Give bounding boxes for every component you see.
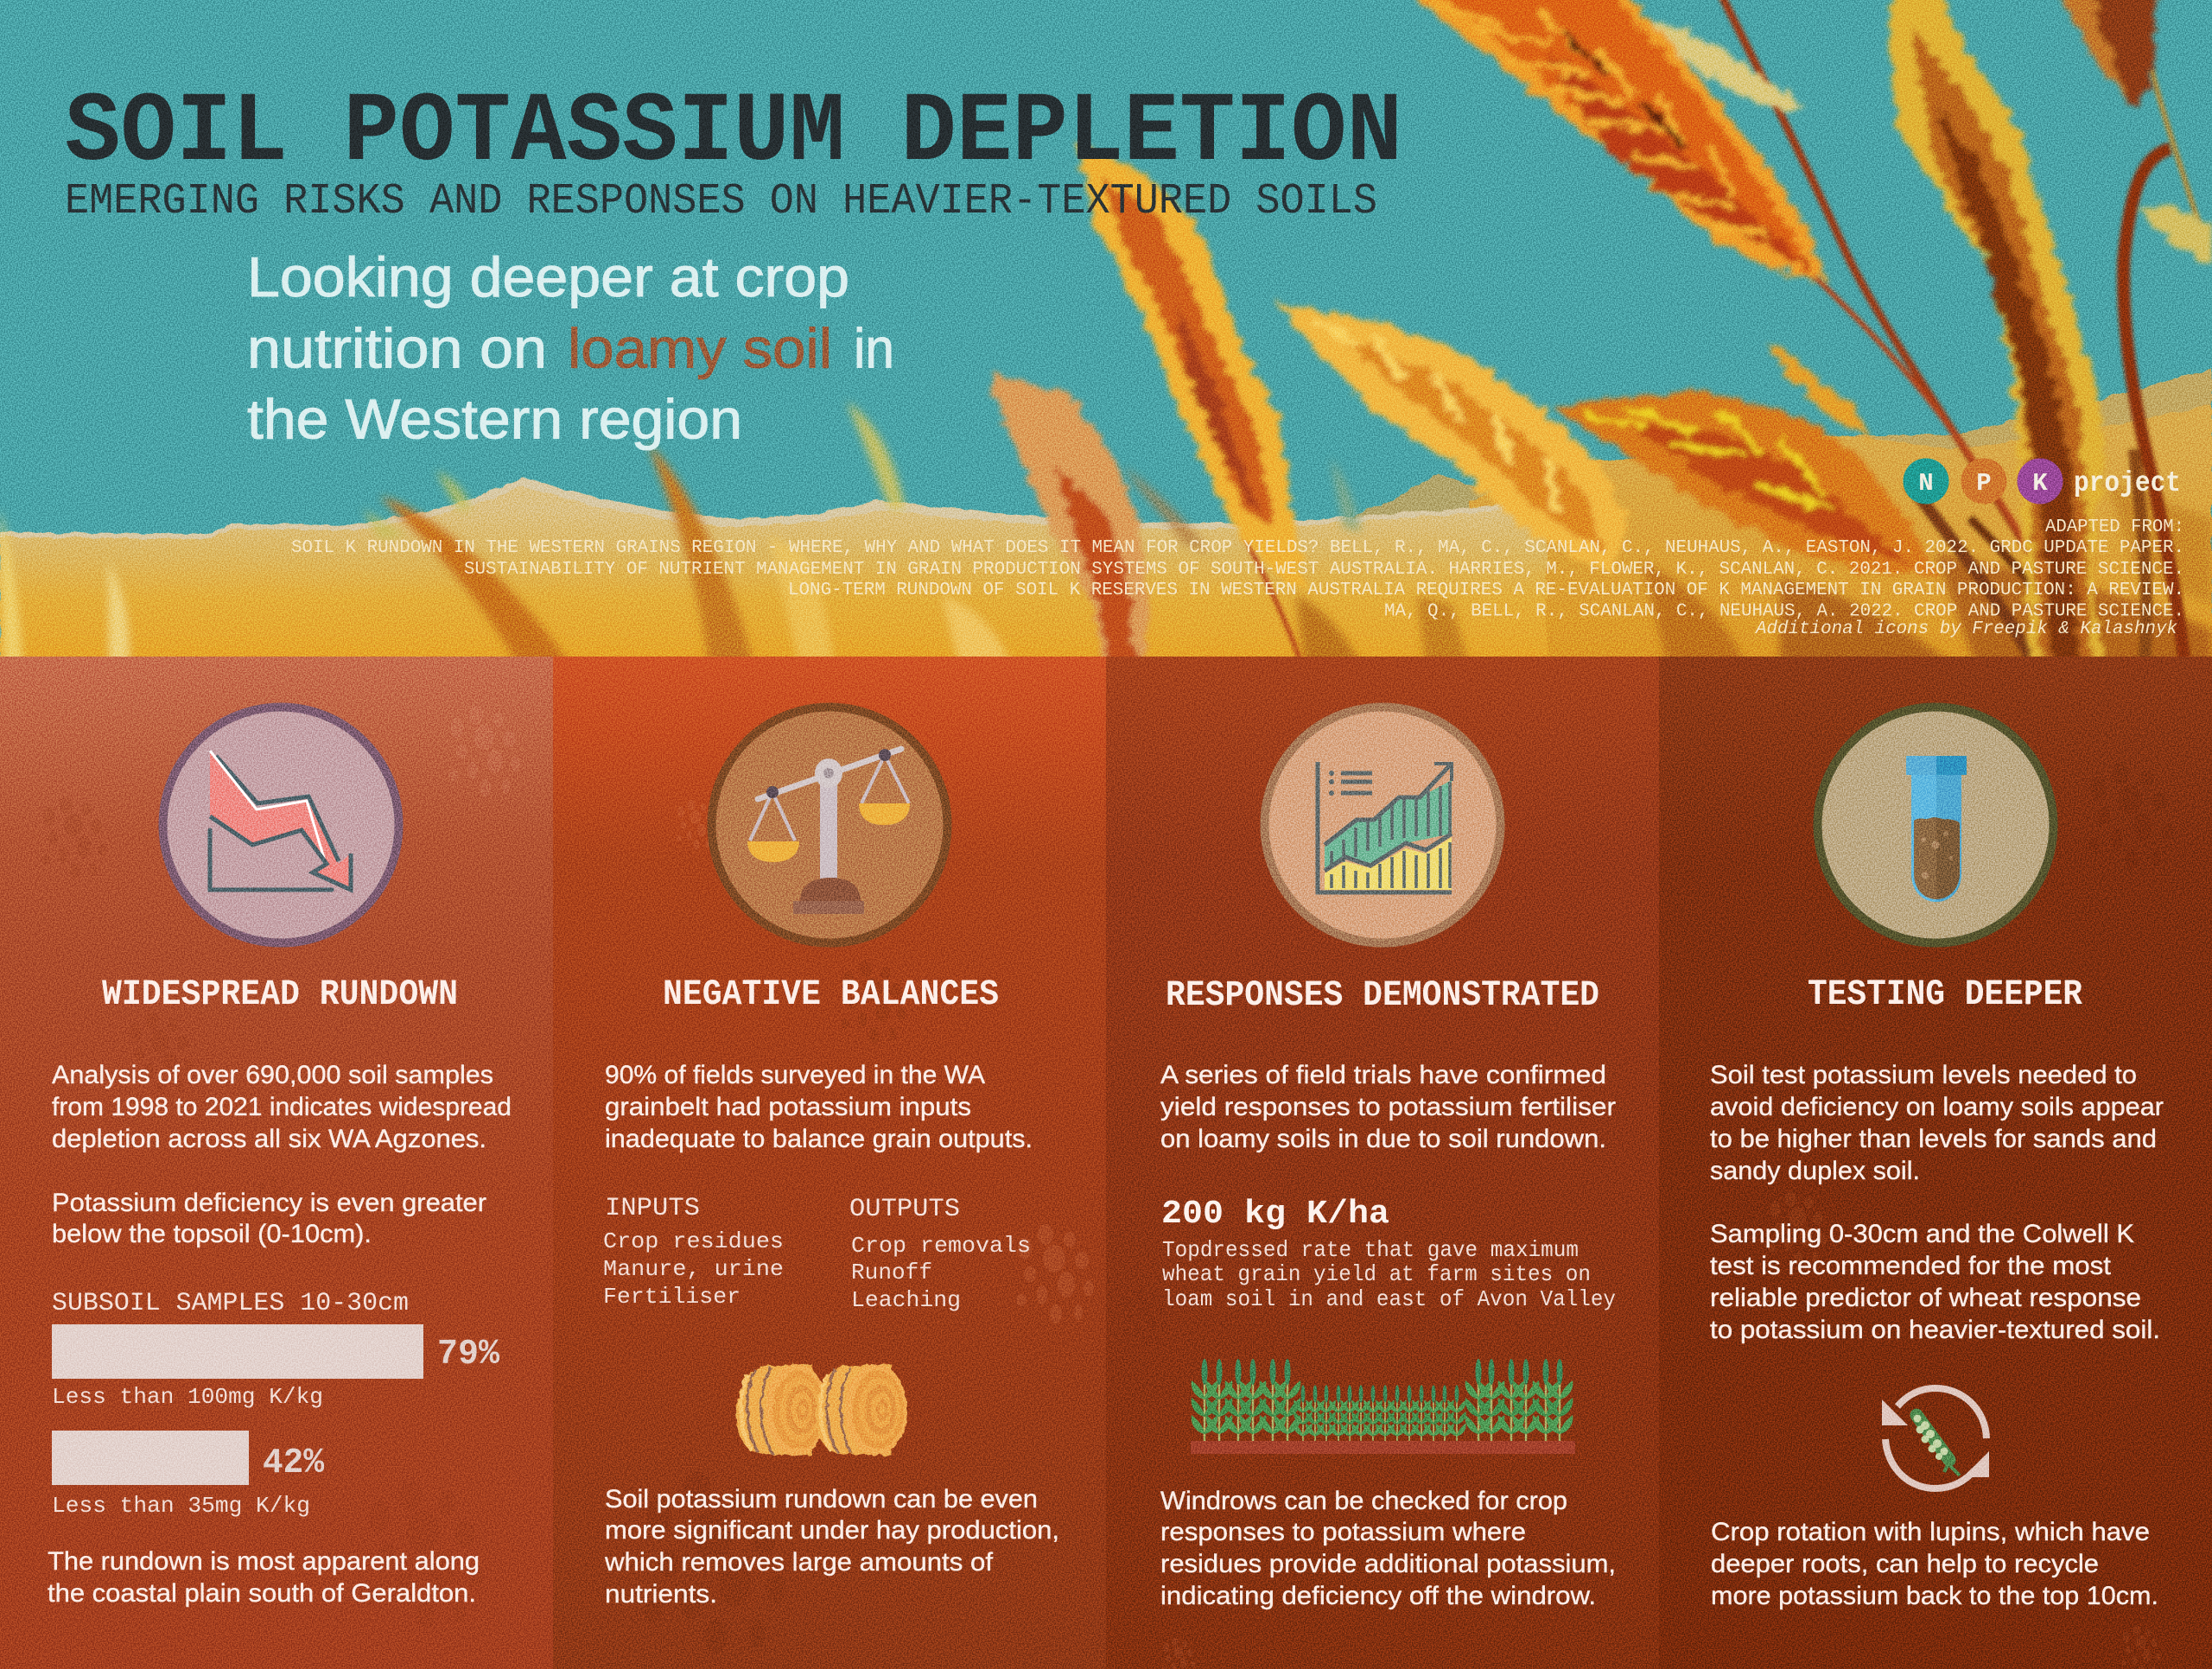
intro text: to be higher than levels for sands and [1710,1125,2157,1153]
tagline: the Western region [247,387,742,451]
heading: TESTING DEEPER [1808,974,2083,1015]
rotation text: deeper roots, can help to recycle [1711,1550,2099,1578]
panel: header wheat field illustration [0,0,2212,691]
heading: WIDESPREAD RUNDOWN [102,974,458,1015]
hay text [604,1485,1059,1609]
icon: rising yield chart [1265,707,1500,943]
hay text: Soil potassium rundown can be even [605,1485,1038,1514]
intro text: depletion across all six WA Agzones. [52,1125,486,1153]
tagline: loamy soil [568,316,832,380]
closing text [48,1547,480,1608]
head F [2074,0,2160,108]
outputs list: Leaching [851,1287,961,1313]
bar chart: subsoil samples: Less than 100mg K/kg [52,1384,323,1410]
outputs list: Runoff [851,1260,932,1285]
inputs list: Crop residues [603,1228,784,1254]
source credits: ADAPTED FROM: [2045,517,2184,537]
pale plume [1624,13,1802,110]
closing text: the coastal plain south of Geraldton. [48,1579,476,1608]
intro text [1160,1061,1616,1153]
windrow text: Windrows can be checked for crop [1160,1487,1567,1515]
bar chart: subsoil samples [52,1289,499,1519]
heading: RESPONSES DEMONSTRATED [1166,974,1599,1016]
stat: 200 kg K/ha: loam soil in and east of Avon Valley [1162,1286,1616,1312]
panel: negative balances [553,657,1106,1669]
subtitle: EMERGING RISKS AND RESPONSES ON HEAVIER-TEXTURED SOILS [65,177,1377,226]
tagline: Looking deeper at crop [247,245,849,308]
head B [1891,0,2108,682]
far hills [0,369,2212,691]
windrow text: responses to potassium where [1160,1518,1526,1546]
bar chart: subsoil samples: Less than 35mg K/kg [52,1493,310,1519]
head G [988,372,1149,682]
sampling text: to potassium on heavier-textured soil. [1710,1316,2160,1344]
hay text: nutrients. [605,1580,717,1609]
head C [1076,143,1305,596]
outputs list [849,1195,1031,1313]
NPK project logo: N [1918,469,1934,498]
windrow text [1160,1487,1616,1610]
blurred background stalks [0,402,2212,674]
intro text [1710,1061,2164,1185]
NPK project logo: P [1976,469,1992,498]
NPK project logo: project [2074,467,2181,499]
rotation text: Crop rotation with lupins, which have [1711,1518,2150,1546]
inputs list: INPUTS [605,1194,700,1223]
head A [1387,0,1827,285]
hay text: more significant under hay production, [605,1516,1059,1545]
icon: crop rotation cycle [1882,1388,1989,1488]
outputs list: OUTPUTS [849,1195,960,1224]
rotation text: more potassium back to the top 10cm. [1711,1582,2158,1610]
icon: soil test tube [1818,707,2053,943]
intro text: grainbelt had potassium inputs [605,1093,971,1121]
inputs list [603,1194,784,1310]
windrow text: residues provide additional potassium, [1160,1550,1616,1578]
NPK project logo [1903,458,2181,505]
intro text: sandy duplex soil. [1710,1157,1920,1185]
sampling text [1710,1220,2160,1344]
bar chart: subsoil samples: 42% [263,1444,324,1483]
tagline [247,245,894,451]
intro text: Analysis of over 690,000 soil samples [52,1061,493,1089]
panel: testing deeper [1659,657,2212,1669]
intro text: avoid deficiency on loamy soils appear [1710,1093,2164,1121]
intro text: Soil test potassium levels needed to [1710,1061,2137,1089]
icon: balance scales [712,707,947,943]
head D [1275,301,1629,574]
inputs list: Fertiliser [603,1284,741,1310]
icon: declining chart [162,707,399,943]
source credits [291,517,2184,639]
stat: 200 kg K/ha [1161,1196,1616,1312]
wheat heads [988,0,2212,682]
heading: NEGATIVE BALANCES [663,974,999,1015]
inputs list: Manure, urine [603,1256,784,1282]
intro text [605,1061,1033,1153]
closing text: The rundown is most apparent along [48,1547,480,1576]
main title: SOIL POTASSIUM DEPLETION [65,78,1402,189]
intro text: yield responses to potassium fertiliser [1160,1093,1616,1121]
intro text: from 1998 to 2021 indicates widespread [52,1093,512,1121]
deficiency text [52,1189,486,1248]
tagline: nutrition on [247,316,547,380]
head E [1551,389,1940,574]
stat: 200 kg K/ha: 200 kg K/ha [1161,1196,1389,1233]
NPK project logo: K [2032,469,2048,498]
windrow text: indicating deficiency off the windrow. [1160,1582,1596,1610]
stat: 200 kg K/ha: Topdressed rate that gave maximum [1162,1237,1579,1263]
sampling text: test is recommended for the most [1710,1252,2112,1280]
stat: 200 kg K/ha: wheat grain yield at farm sites on [1162,1261,1591,1287]
bar chart: subsoil samples: 79% [437,1335,499,1374]
bar chart: subsoil samples: SUBSOIL SAMPLES 10-30cm [52,1289,409,1318]
rotation text [1711,1518,2158,1610]
intro text: A series of field trials have confirmed [1160,1061,1606,1089]
panel: widespread rundown [0,657,553,1669]
intro text: inadequate to balance grain outputs. [605,1125,1033,1153]
sampling text: Sampling 0-30cm and the Colwell K [1710,1220,2134,1248]
sampling text: reliable predictor of wheat response [1710,1284,2141,1312]
tagline: in [854,316,894,380]
icon: hay bales [736,1364,907,1456]
intro text [52,1061,512,1153]
panel: responses demonstrated [1106,657,1659,1669]
source credits: LONG-TERM RUNDOWN OF SOIL K RESERVES IN WESTERN AUSTRALIA REQUIRES A RE-EVALUATION OF K MANAGEMENT IN GRAIN PRODUCTION: A REVIEW. [788,581,2184,600]
deficiency text: below the topsoil (0-10cm). [52,1220,372,1248]
icon: windrow crop row [1191,1359,1575,1454]
source credits: MA, Q., BELL, R., SCANLAN, C., NEUHAUS, A. 2022. CROP AND PASTURE SCIENCE. [1384,601,2184,622]
intro text: on loamy soils in due to soil rundown. [1160,1125,1606,1153]
source credits: SOIL K RUNDOWN IN THE WESTERN GRAINS REGION - WHERE, WHY AND WHAT DOES IT MEAN FOR CROP YIELDS? BELL, R., MA, C., SCANLAN, C., NEUHAUS, A., EASTON, J. 2022. GRDC UPDATE PAPER. [291,538,2184,558]
hay text: which removes large amounts of [604,1548,994,1577]
stems [1244,0,2199,674]
source credits: SUSTAINABILITY OF NUTRIENT MANAGEMENT IN GRAIN PRODUCTION SYSTEMS OF SOUTH-WEST AUSTRALIA. HARRIES, M., FLOWER, K., SCANLAN, C. 2021. CROP AND PASTURE SCIENCE. [464,560,2184,580]
intro text: 90% of fields surveyed in the WA [605,1061,985,1089]
deficiency text: Potassium deficiency is even greater [52,1189,486,1217]
source credits: Additional icons by Freepik & Kalashnyk [1754,619,2177,639]
sky background [0,0,2212,682]
outputs list: Crop removals [851,1233,1031,1259]
